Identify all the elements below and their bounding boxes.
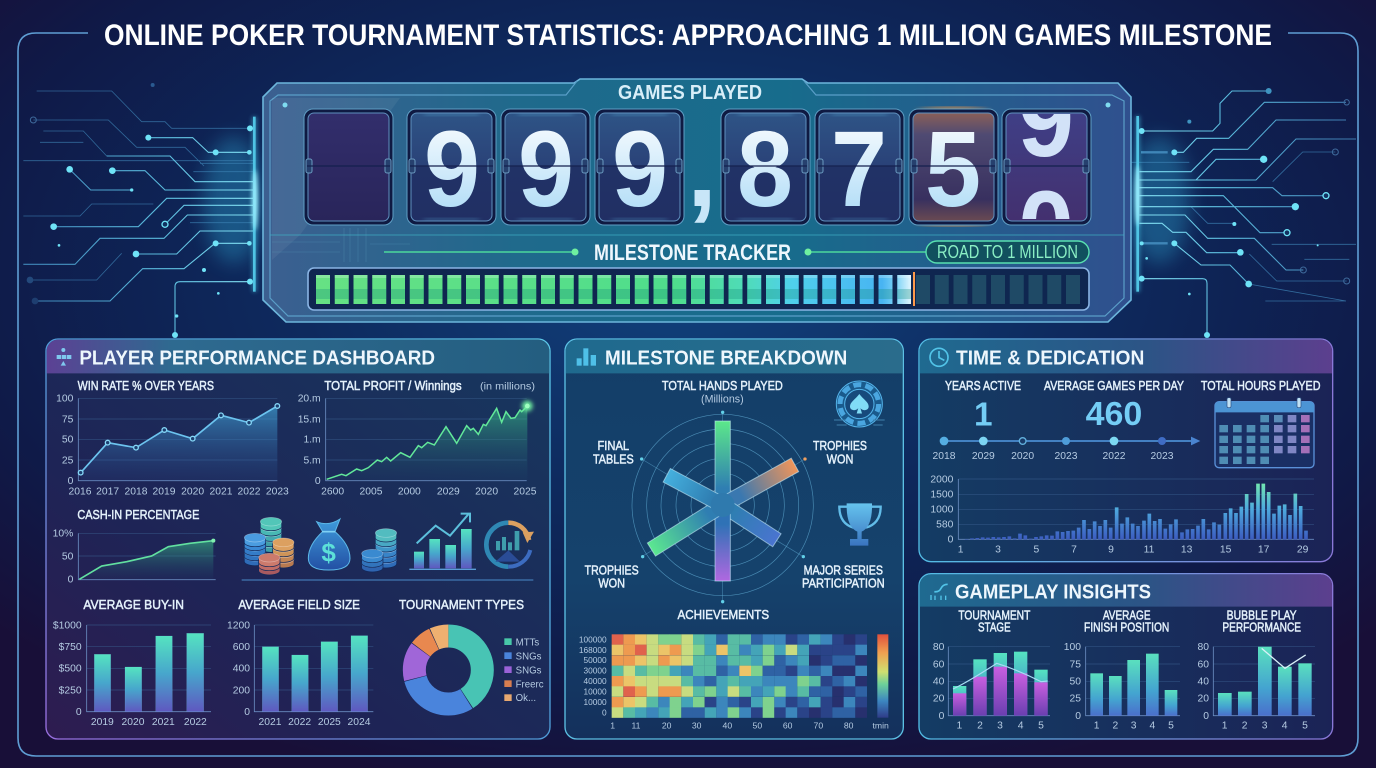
chart: cash-in percentage: 10% <box>53 528 73 539</box>
chart: heatmap: tmin <box>872 720 889 730</box>
panel: time and dedication <box>919 339 1333 562</box>
chart: average finish position <box>1064 607 1180 731</box>
chart: bubble play performance: 20 <box>1197 694 1209 705</box>
chart: win rate: 2023 <box>266 487 289 498</box>
flip digit: 7: 7 <box>831 108 887 229</box>
chart: win rate: 2020 <box>181 487 204 498</box>
chart: tournament types donut: MTTs <box>516 638 539 649</box>
chart: win rate: 2016 <box>69 487 92 498</box>
icon: trend <box>931 584 948 600</box>
chart: average field size: AVERAGE FIELD SIZE <box>238 597 360 612</box>
chart: bubble play performance: 4 <box>1282 720 1288 731</box>
chart: average buy-in: 2019 <box>91 717 114 728</box>
label: total hands played: TOTAL HANDS PLAYED <box>662 378 783 393</box>
chart: hours bars: 17 <box>1258 544 1270 555</box>
chart: tournament stage: 1 <box>956 720 962 731</box>
chart: hours bars: 29 <box>1297 544 1309 555</box>
chart: hours bars: 7 <box>1071 544 1077 555</box>
flip digit: 8: 8 <box>737 108 793 229</box>
chart: heatmap: 60 <box>783 720 793 730</box>
chart: total profit: 0 <box>315 476 321 487</box>
flip digit: 5 highlighted <box>909 108 998 229</box>
chart: heatmap: 10000 <box>583 697 607 707</box>
chart: heatmap: 50000 <box>583 655 607 665</box>
heading: PLAYER PERFORMANCE DASHBOARD <box>79 346 435 369</box>
circuit decoration: right <box>1109 88 1356 338</box>
flip digit: 8 <box>721 108 810 229</box>
chart: bubble play performance: 80 <box>1197 642 1209 653</box>
circuit decoration: left <box>23 83 263 338</box>
chart: heatmap: 168000 <box>579 645 607 655</box>
label: total hours played: TOTAL HOURS PLAYED <box>1201 378 1320 393</box>
icon: coin stacks <box>244 517 294 575</box>
chart: average buy-in: 2022 <box>184 717 207 728</box>
timeline <box>933 437 1200 462</box>
chart: win rate: 2018 <box>125 487 148 498</box>
chart: tournament types donut: SNGs <box>516 666 542 677</box>
stat: years active: YEARS ACTIVE <box>945 378 1021 393</box>
chart: average finish position: FINISH POSITION <box>1084 620 1169 635</box>
panel header <box>47 340 549 373</box>
icon: calendar <box>1215 398 1314 468</box>
chart: average finish position: 75 <box>1069 659 1081 670</box>
chart: tournament stage: 40 <box>933 677 945 688</box>
flip digit: 5 highlighted: 5 <box>925 108 981 229</box>
chart: total profit: 1.m <box>303 435 321 446</box>
radar chart <box>632 411 813 603</box>
chart: tournament types donut: Freerc <box>516 680 544 691</box>
chart: bubble play performance: PERFORMANCE <box>1222 620 1301 635</box>
label: trophies won right: WON <box>827 451 853 466</box>
label: final tables: TABLES <box>593 451 634 466</box>
icon: money bag: $ <box>321 538 336 568</box>
chart: heatmap: 1 <box>610 720 615 730</box>
chart: tournament stage: 4 <box>1018 720 1024 731</box>
chart: tournament stage: 0 <box>939 711 945 722</box>
chart: total profit: 15.m <box>298 414 321 425</box>
flip digit: rolling 9 and 0 <box>1002 58 1091 289</box>
chart: average buy-in <box>53 597 211 728</box>
chart: average buy-in: AVERAGE BUY-IN <box>83 597 184 612</box>
icon: trophy <box>839 503 881 546</box>
chart: tournament stage: TOURNAMENT <box>958 607 1030 622</box>
chart: cash-in percentage: 50 <box>62 551 74 562</box>
label: trophies won left: TROPHIES <box>585 562 639 577</box>
flip digit: blank <box>304 109 393 225</box>
label: major series participation: MAJOR SERIES <box>804 562 883 577</box>
chart: tournament stage: 60 <box>933 659 945 670</box>
chart: win rate: 0 <box>68 476 74 487</box>
chart: cash-in percentage: CASH-IN PERCENTAGE <box>77 507 199 522</box>
chart: heatmap: 10000 <box>583 687 607 697</box>
chart: tournament stage: 3 <box>997 720 1003 731</box>
panel: player performance dashboard <box>46 339 550 739</box>
chart: average buy-in: $500 <box>59 664 82 675</box>
chart: average finish position: 1 <box>1094 720 1100 731</box>
chart: heatmap: 40000 <box>583 676 607 686</box>
chart: average buy-in: 0 <box>76 707 82 718</box>
icon: bars <box>577 348 596 366</box>
label: final tables: FINAL <box>597 438 629 453</box>
chart: total profit: 20.m <box>298 394 321 405</box>
heading: TIME & DEDICATION <box>956 346 1144 369</box>
timeline: 2020 <box>1011 451 1034 462</box>
chart: average finish position: 0 <box>1075 711 1081 722</box>
badge: road to 1 million: ROAD TO 1 MILLION <box>937 242 1078 262</box>
label: trophies won left: WON <box>598 576 625 591</box>
chart: bubble play performance: 3 <box>1262 720 1268 731</box>
chart: hours bars: 9 <box>1108 544 1114 555</box>
chart: average buy-in: $1000 <box>53 620 82 631</box>
label: major series participation <box>802 562 885 591</box>
panel header <box>920 574 1332 607</box>
timeline: 2018 <box>933 451 956 462</box>
chart: heatmap: 11 <box>631 720 641 730</box>
timeline: 2023 <box>1151 451 1174 462</box>
label: trophies won right <box>813 438 867 466</box>
chart: bubble play performance: 40 <box>1197 677 1209 688</box>
chart: heatmap: 0 <box>602 708 607 718</box>
timeline: 2023 <box>1055 451 1078 462</box>
icon: money bag <box>308 519 350 570</box>
chart: total profit: 2025 <box>514 487 537 498</box>
flip digit: 9 <box>595 108 684 229</box>
label: achievements: ACHIEVEMENTS <box>677 607 769 622</box>
chart: average finish position: 4 <box>1149 720 1155 731</box>
chart: hours bars: 15 <box>1220 544 1232 555</box>
label: total hands played: (Millions) <box>701 394 744 406</box>
chart: total profit: 2005 <box>360 487 383 498</box>
chart: bubble play performance: 60 <box>1197 659 1209 670</box>
flip digit: 7 <box>815 108 904 229</box>
flip digit: 9: 9 <box>518 108 574 229</box>
chart: bubble play performance: 2 <box>1242 720 1248 731</box>
timeline: 2022 <box>1103 451 1126 462</box>
chart: win rate: 50 <box>62 435 74 446</box>
chart: tournament types donut: TOURNAMENT TYPES <box>399 597 524 612</box>
chart: win rate <box>56 378 289 498</box>
stat: years active <box>945 378 1021 434</box>
chart: hours bars: 11 <box>1144 544 1155 555</box>
chart: bubble play performance <box>1197 607 1315 731</box>
heading: milestone tracker: MILESTONE TRACKER <box>594 240 791 265</box>
counter frame <box>263 79 1131 322</box>
flip digit: 9: 9 <box>612 108 668 229</box>
chart: win rate: 2017 <box>96 487 119 498</box>
panel: games played counter <box>263 58 1131 322</box>
chart: bubble play performance: 0 <box>1203 711 1209 722</box>
chart: hours bars: 5 <box>1033 544 1039 555</box>
chart: average field size: 2024 <box>348 717 371 728</box>
chart: hours bars: 1 <box>958 544 964 555</box>
chart: average finish position: 25 <box>1069 694 1081 705</box>
icon: chip cluster <box>57 348 71 366</box>
chart: total profit: (in millions) <box>480 381 535 392</box>
chart: total profit: 2029 <box>437 487 460 498</box>
chart: win rate: WIN RATE % OVER YEARS <box>78 378 214 393</box>
stat: average games per day: AVERAGE GAMES PER DAY <box>1044 378 1184 393</box>
chart: average finish position: AVERAGE <box>1103 607 1151 622</box>
chart: tournament stage: 80 <box>933 642 945 653</box>
icon: clock <box>930 348 948 366</box>
chart: heatmap: 50 <box>753 720 762 730</box>
chart: average field size <box>227 597 373 728</box>
comma: , <box>687 108 717 229</box>
label: trophies won left <box>585 562 639 591</box>
chart: tournament stage: 5 <box>1038 720 1044 731</box>
chart: win rate: 2022 <box>238 487 261 498</box>
stat: years active: 1 <box>974 397 993 434</box>
chart: average finish position: 3 <box>1131 720 1137 731</box>
chart: bubble play performance: 5 <box>1302 720 1308 731</box>
chart: average field size: 200 <box>233 685 250 696</box>
progress bar <box>308 268 1089 310</box>
chart: average field size: 2021 <box>259 717 282 728</box>
label: total hands played <box>662 378 783 406</box>
label: major series participation: PARTICIPATION <box>802 576 885 591</box>
chart: average field size: 0 <box>244 707 250 718</box>
chart: heatmap: 70 <box>814 720 823 730</box>
icon: poker chip <box>834 381 885 427</box>
chart: average buy-in: 2020 <box>122 717 145 728</box>
chart: tournament stage: STAGE <box>978 620 1011 635</box>
chart: tournament types donut: SNGs <box>516 652 542 663</box>
flip digit: 9 <box>501 108 590 229</box>
chart: hours bars: 2000 <box>930 474 954 485</box>
panel header <box>920 340 1332 373</box>
chart: win rate: 2019 <box>153 487 176 498</box>
flip digit: 9: 9 <box>424 108 480 229</box>
chart: hours bars: 1000 <box>930 505 954 516</box>
chart: average buy-in: 2021 <box>152 717 175 728</box>
label: final tables <box>593 438 634 466</box>
heading: GAMEPLAY INSIGHTS <box>955 580 1151 603</box>
chart: average field size: 2022 <box>288 717 311 728</box>
chart: tournament types donut: Ok... <box>516 693 536 704</box>
chart: heatmap: 40 <box>723 720 732 730</box>
chart: average finish position: 5 <box>1168 720 1174 731</box>
heading: MILESTONE BREAKDOWN <box>605 346 847 369</box>
chart: bubble play performance: BUBBLE PLAY <box>1227 607 1297 622</box>
chart: bubble play performance: 1 <box>1222 720 1228 731</box>
stat: average games per day <box>1044 378 1184 433</box>
icon: small coin stacks <box>362 529 397 572</box>
chart: hours bars: 1500 <box>930 490 954 501</box>
chart: heatmap: 80 <box>844 720 854 730</box>
chart: total profit: 5.m <box>303 455 321 466</box>
chart: total profit: TOTAL PROFIT / Winnings <box>324 378 462 393</box>
icon: rising bars with arrow <box>409 514 476 569</box>
chart: heatmap: 30000 <box>583 666 607 676</box>
panel header <box>566 340 903 373</box>
chart: average finish position: 2 <box>1112 720 1118 731</box>
chart: average field size: 400 <box>233 664 250 675</box>
chart: average field size: 1200 <box>227 620 250 631</box>
label: trophies won right: TROPHIES <box>813 438 867 453</box>
panel: milestone breakdown <box>565 339 903 739</box>
chart: total profit <box>298 378 537 498</box>
icon: circular chart <box>486 523 534 567</box>
chart: tournament stage: 2 <box>977 720 983 731</box>
timeline: 2029 <box>972 451 995 462</box>
chart: hours bars: 580 <box>936 520 954 531</box>
flip digit: 9 <box>407 108 496 229</box>
chart: total profit: 2600 <box>321 487 344 498</box>
chart: average field size: 2025 <box>318 717 341 728</box>
chart: win rate: 75 <box>62 414 74 425</box>
chart: win rate: 25 <box>62 455 74 466</box>
chart: heatmap: 20 <box>662 720 672 730</box>
chart: tournament types donut <box>399 597 544 704</box>
chart: cash-in percentage: 0 <box>68 575 74 586</box>
chart: heatmap: 100000 <box>579 634 607 644</box>
chart: hours bars: 13 <box>1181 544 1193 555</box>
chart: average field size: 600 <box>233 642 250 653</box>
chart: heatmap: 30 <box>692 720 702 730</box>
chart: hours bars: 3 <box>995 544 1001 555</box>
chart: average finish position: 100 <box>1064 642 1081 653</box>
chart: win rate: 100 <box>56 394 74 405</box>
chart: average buy-in: $750 <box>59 642 82 653</box>
chart: tournament stage: 20 <box>933 694 945 705</box>
chart: average buy-in: $250 <box>59 685 82 696</box>
chart: total profit: 2000 <box>398 487 421 498</box>
chart: total profit: 2020 <box>475 487 498 498</box>
chart: average finish position: 50 <box>1069 677 1081 688</box>
heading: games played: GAMES PLAYED <box>618 82 762 104</box>
chart: hours bars <box>930 474 1314 555</box>
chart: cash-in percentage <box>53 507 216 586</box>
stat: average games per day: 460 <box>1086 396 1142 433</box>
chart: heatmap <box>579 634 889 730</box>
chart: win rate: 2021 <box>210 487 233 498</box>
chart: hours bars: 0 <box>948 535 954 546</box>
panel: gameplay insights <box>919 574 1333 739</box>
chart: tournament stage <box>933 607 1050 731</box>
